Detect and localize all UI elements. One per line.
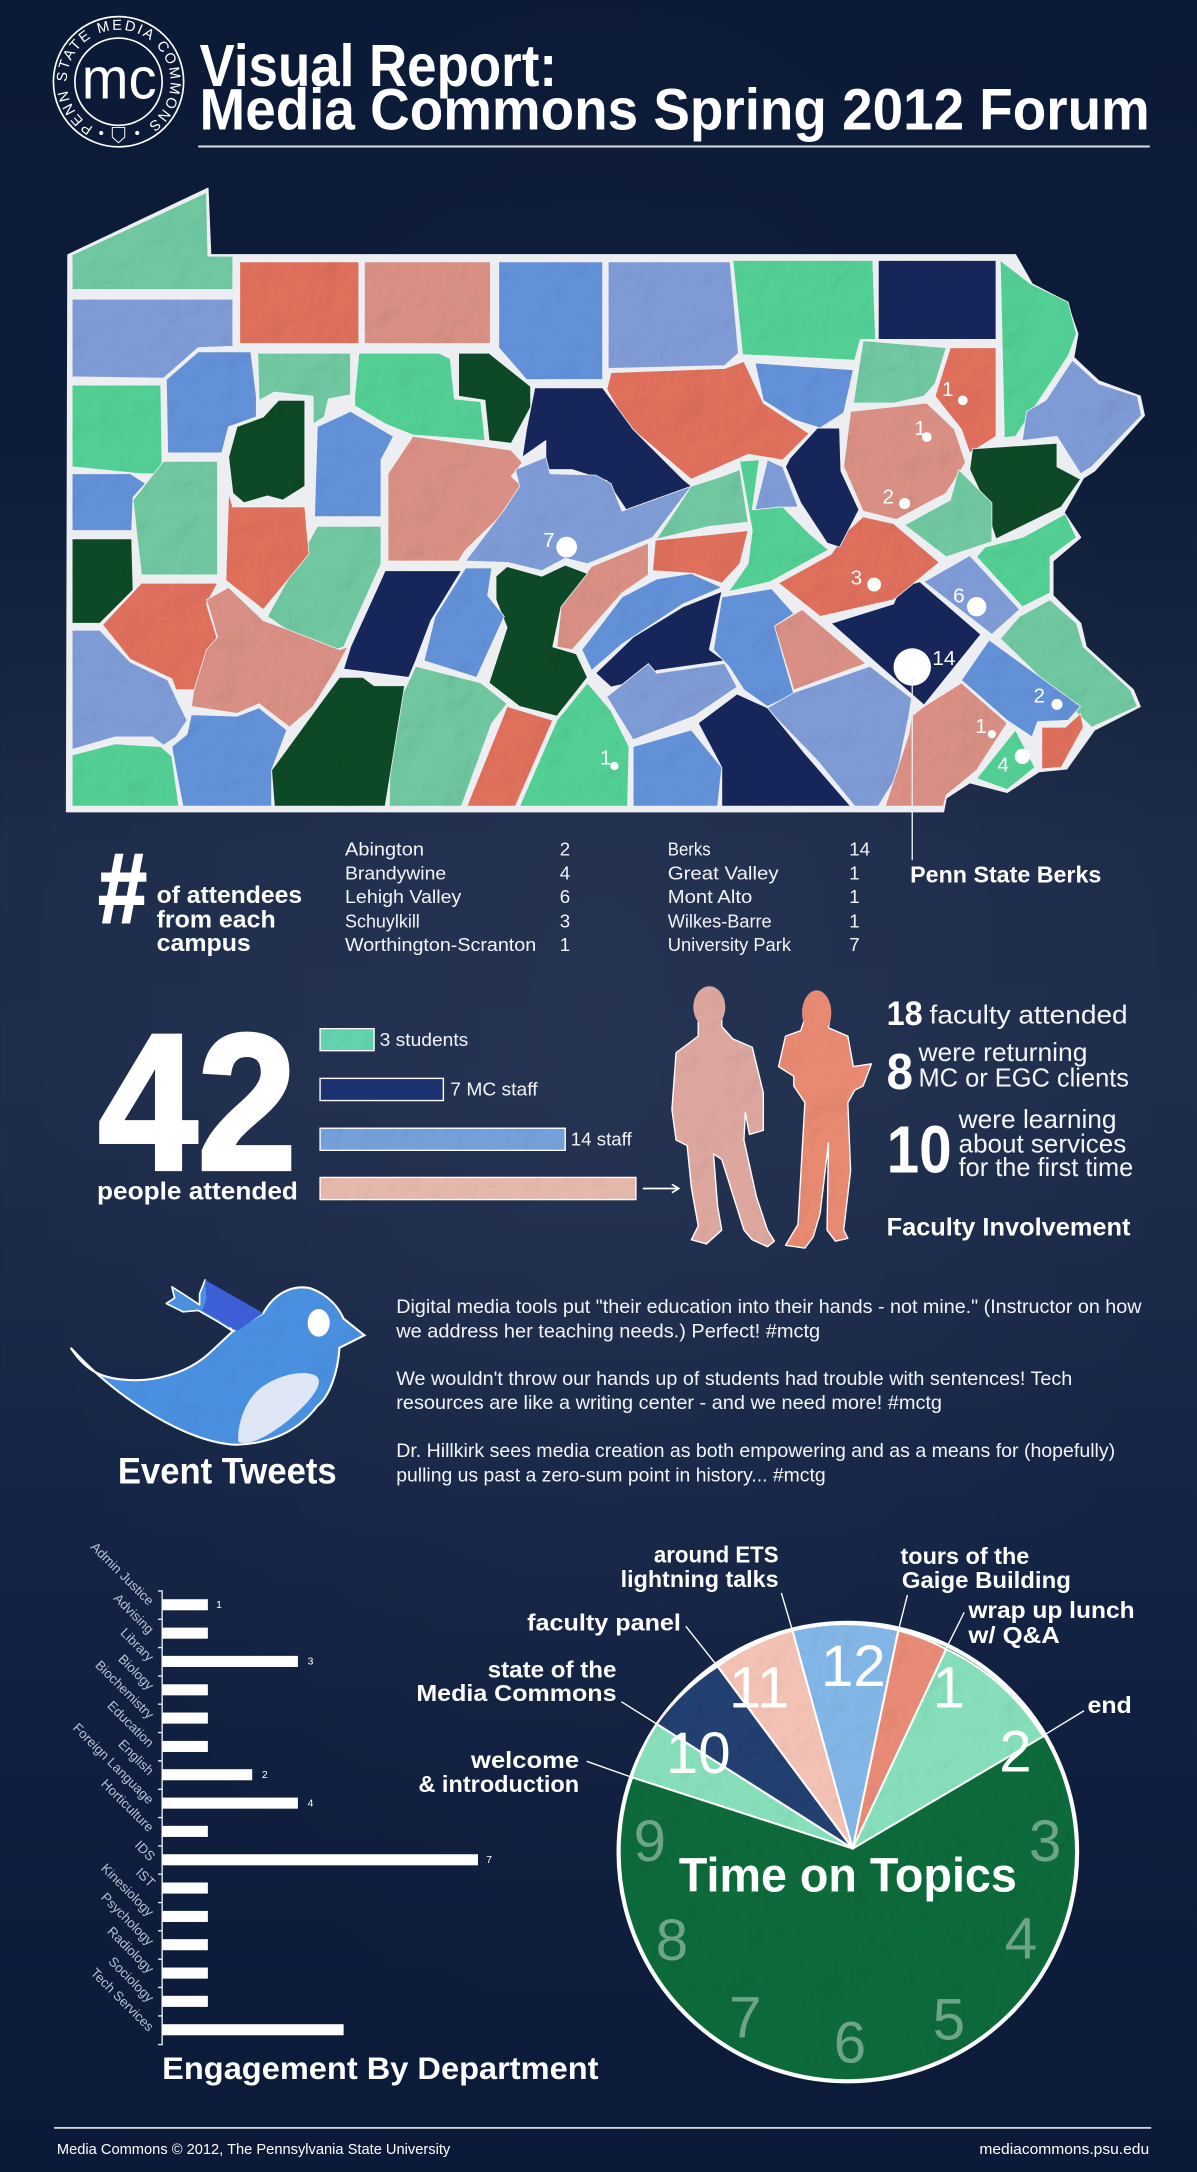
map: Pennsylvania state outline: [67, 188, 1144, 812]
table: campus attendance counts: Brandywine: [345, 863, 446, 884]
heading: attendees from each campus: of attendees: [157, 882, 302, 909]
clock numbers on pie: 11: [729, 1655, 789, 1720]
bar chart: attendee types: 14 staff: [571, 1129, 633, 1150]
chart: engagement by department bars: [158, 1591, 492, 2045]
stats: faculty involvement: [887, 995, 1133, 1242]
heading: attendees from each campus: [98, 834, 302, 957]
heading: Engagement By Department: Engagement By Department: [162, 2050, 599, 2086]
axis labels: departments: [70, 1539, 158, 2034]
pie leader lines: [587, 1593, 1084, 1777]
clock numbers on pie: 2: [999, 1720, 1032, 1785]
axis labels: departments: Tech Services: [88, 1965, 157, 2034]
stats: faculty involvement: for the first time: [959, 1152, 1133, 1182]
title: Media Commons Spring 2012 Forum: [200, 78, 1150, 143]
clock numbers on pie: 8: [656, 1908, 688, 1973]
stats: faculty involvement: 10: [887, 1114, 952, 1188]
table: campus attendance counts: University Park: [668, 934, 792, 955]
campus markers on map: 2: [882, 486, 894, 509]
stats: faculty involvement: Faculty Involvement: [887, 1214, 1130, 1242]
pie topic labels: w/ Q&A: [967, 1622, 1060, 1648]
pie topic labels: welcome: [470, 1747, 579, 1773]
table: campus attendance counts: 7: [849, 934, 860, 955]
axis labels: departments: Education: [104, 1698, 157, 1750]
axis labels: departments: IDS: [132, 1838, 158, 1864]
campus markers on map: 6: [953, 585, 965, 608]
heading: Time on Topics: Time on Topics: [679, 1848, 1017, 1902]
table: campus attendance counts: Mont Alto: [668, 886, 752, 907]
heading: attendees from each campus: #: [98, 834, 147, 945]
stats: faculty involvement: were learning: [958, 1104, 1117, 1134]
heading: attendees from each campus: campus: [157, 930, 251, 957]
text block: tweets: We wouldn't throw our hands up of students had trouble with sentences! Tech: [396, 1368, 1072, 1390]
clock numbers on pie: 1: [933, 1655, 965, 1720]
table: campus attendance counts: Abington: [345, 838, 424, 859]
icon: faculty woman silhouette: [779, 990, 871, 1248]
map: Pennsylvania counties coloured by group: [72, 193, 1142, 806]
footer: Media Commons © 2012, The Pennsylvania State University: [57, 2142, 451, 2158]
clock numbers on pie: [634, 1634, 1061, 2076]
big number: 42 people attended: people attended: [97, 1178, 298, 1206]
axis labels: departments: English: [115, 1737, 157, 1778]
clock numbers on pie: 7: [729, 1986, 762, 2051]
axis labels: departments: Advising: [111, 1591, 157, 1637]
big number: 42 people attended: 42: [98, 994, 297, 1211]
axis labels: departments: Kinesiology: [98, 1861, 157, 1919]
axis labels: departments: Biology: [115, 1651, 157, 1693]
chart: engagement by department bars: 7: [486, 1855, 492, 1866]
pie topic labels: state of the: [488, 1656, 617, 1682]
text block: tweets: [395, 1296, 1143, 1486]
table: campus attendance counts: Worthington-Scranton: [345, 934, 536, 955]
axis labels: departments: Biochemistry: [92, 1657, 157, 1722]
heading: attendees from each campus: from each: [157, 906, 276, 933]
pie topic labels: around ETS: [654, 1542, 779, 1568]
logo: Penn State Media Commons seal: PENN STATE MEDIA COMMONS: [56, 20, 181, 135]
table: campus attendance counts: Wilkes-Barre: [668, 910, 772, 931]
text block: tweets: Digital media tools put "their education into their hands - not mine." (Instructor on how: [396, 1296, 1143, 1318]
table: campus attendance counts: Lehigh Valley: [345, 886, 462, 907]
pie chart: time on topics: [619, 1623, 1077, 2081]
table: campus attendance counts: Great Valley: [668, 863, 779, 884]
chart: engagement by department bars: 1: [216, 1600, 222, 1611]
campus markers on map: 1: [914, 417, 926, 440]
text block: tweets: we address her teaching needs.) Perfect! #mctg: [395, 1320, 820, 1342]
footer: [54, 2127, 1151, 2158]
text block: tweets: Dr. Hillkirk sees media creation as both empowering and as a means for (hopefully): [396, 1440, 1115, 1462]
table: campus attendance counts: 3: [560, 910, 570, 931]
pie topic labels: tours of the: [900, 1543, 1029, 1569]
clock numbers on pie: 9: [634, 1809, 666, 1874]
chart: engagement by department bars: 4: [308, 1798, 314, 1809]
axis labels: departments: Library: [117, 1625, 157, 1665]
table: campus attendance counts: 1: [560, 934, 570, 955]
chart: engagement by department bars: 3: [308, 1656, 314, 1667]
icon: faculty man silhouette: [672, 986, 774, 1247]
pie topic labels: end: [1087, 1692, 1132, 1718]
icon: twitter bird: [71, 1280, 364, 1445]
stats: faculty involvement: faculty attended: [930, 1000, 1128, 1030]
pie topic labels: & introduction: [418, 1771, 579, 1797]
table: campus attendance counts: [345, 838, 870, 955]
arrow: bar to faculty: [643, 1184, 679, 1193]
axis labels: departments: Sociology: [105, 1954, 157, 2005]
campus markers on map: 7: [543, 529, 555, 552]
pie topic labels: [416, 1542, 1135, 1797]
text block: tweets: resources are like a writing center - and we need more! #mctg: [396, 1392, 942, 1414]
table: campus attendance counts: 4: [560, 863, 570, 884]
clock numbers on pie: 10: [666, 1721, 731, 1786]
callout: Penn State Berks: Penn State Berks: [910, 861, 1101, 887]
stats: faculty involvement: MC or EGC clients: [918, 1063, 1129, 1093]
campus markers on map: 14: [932, 647, 955, 670]
bar chart: attendee types: 3 students: [380, 1029, 468, 1050]
clock numbers on pie: 4: [1005, 1907, 1037, 1972]
title: Visual Report:: [200, 32, 557, 99]
footer: mediacommons.psu.edu: [979, 2142, 1149, 2158]
pie topic labels: wrap up lunch: [967, 1597, 1135, 1623]
clock numbers on pie: 3: [1029, 1809, 1061, 1874]
table: campus attendance counts: 14: [849, 838, 870, 859]
pie topic labels: Gaige Building: [902, 1567, 1071, 1593]
pie topic labels: faculty panel: [527, 1609, 681, 1635]
table: campus attendance counts: Berks: [668, 838, 711, 859]
bar chart: attendee types: [320, 1029, 636, 1200]
title: [198, 32, 1150, 148]
stats: faculty involvement: about services: [959, 1128, 1126, 1158]
table: campus attendance counts: 2: [560, 838, 570, 859]
axis labels: departments: Psychology: [98, 1890, 157, 1949]
table: campus attendance counts: 6: [560, 886, 570, 907]
campus markers on map: 1: [600, 747, 611, 770]
clock numbers on pie: 12: [821, 1634, 886, 1699]
logo: Penn State Media Commons seal: mc: [82, 46, 157, 111]
campus markers on map: [543, 378, 1063, 777]
table: campus attendance counts: 1: [849, 886, 860, 907]
heading: Event Tweets: Event Tweets: [118, 1450, 337, 1492]
stats: faculty involvement: 8: [887, 1043, 913, 1100]
stats: faculty involvement: were returning: [917, 1037, 1087, 1067]
campus markers on map: 2: [1033, 684, 1045, 707]
clock numbers on pie: 5: [933, 1988, 965, 2053]
pie topic labels: Media Commons: [416, 1680, 617, 1706]
campus markers on map: 3: [851, 567, 862, 590]
campus markers on map: 1: [942, 378, 954, 401]
clock numbers on pie: 6: [834, 2011, 866, 2076]
axis labels: departments: IST: [133, 1865, 158, 1890]
table: campus attendance counts: 1: [849, 910, 860, 931]
axis labels: departments: Horticulture: [98, 1776, 157, 1835]
axis labels: departments: Radiology: [104, 1924, 157, 1976]
axis labels: departments: Admin Justice: [88, 1539, 157, 1608]
campus markers on map: 1: [975, 715, 987, 738]
axis labels: departments: Foreign Language: [70, 1720, 157, 1807]
chart: engagement by department bars: 2: [262, 1770, 268, 1781]
pie topic labels: lightning talks: [621, 1566, 779, 1592]
table: campus attendance counts: Schuylkill: [345, 910, 420, 931]
campus markers on map: 4: [997, 754, 1009, 777]
text block: tweets: pulling us past a zero-sum point in history... #mctg: [396, 1464, 826, 1486]
bar chart: attendee types: 7 MC staff: [450, 1079, 538, 1100]
stats: faculty involvement: 18: [887, 995, 923, 1033]
table: campus attendance counts: 1: [849, 863, 860, 884]
